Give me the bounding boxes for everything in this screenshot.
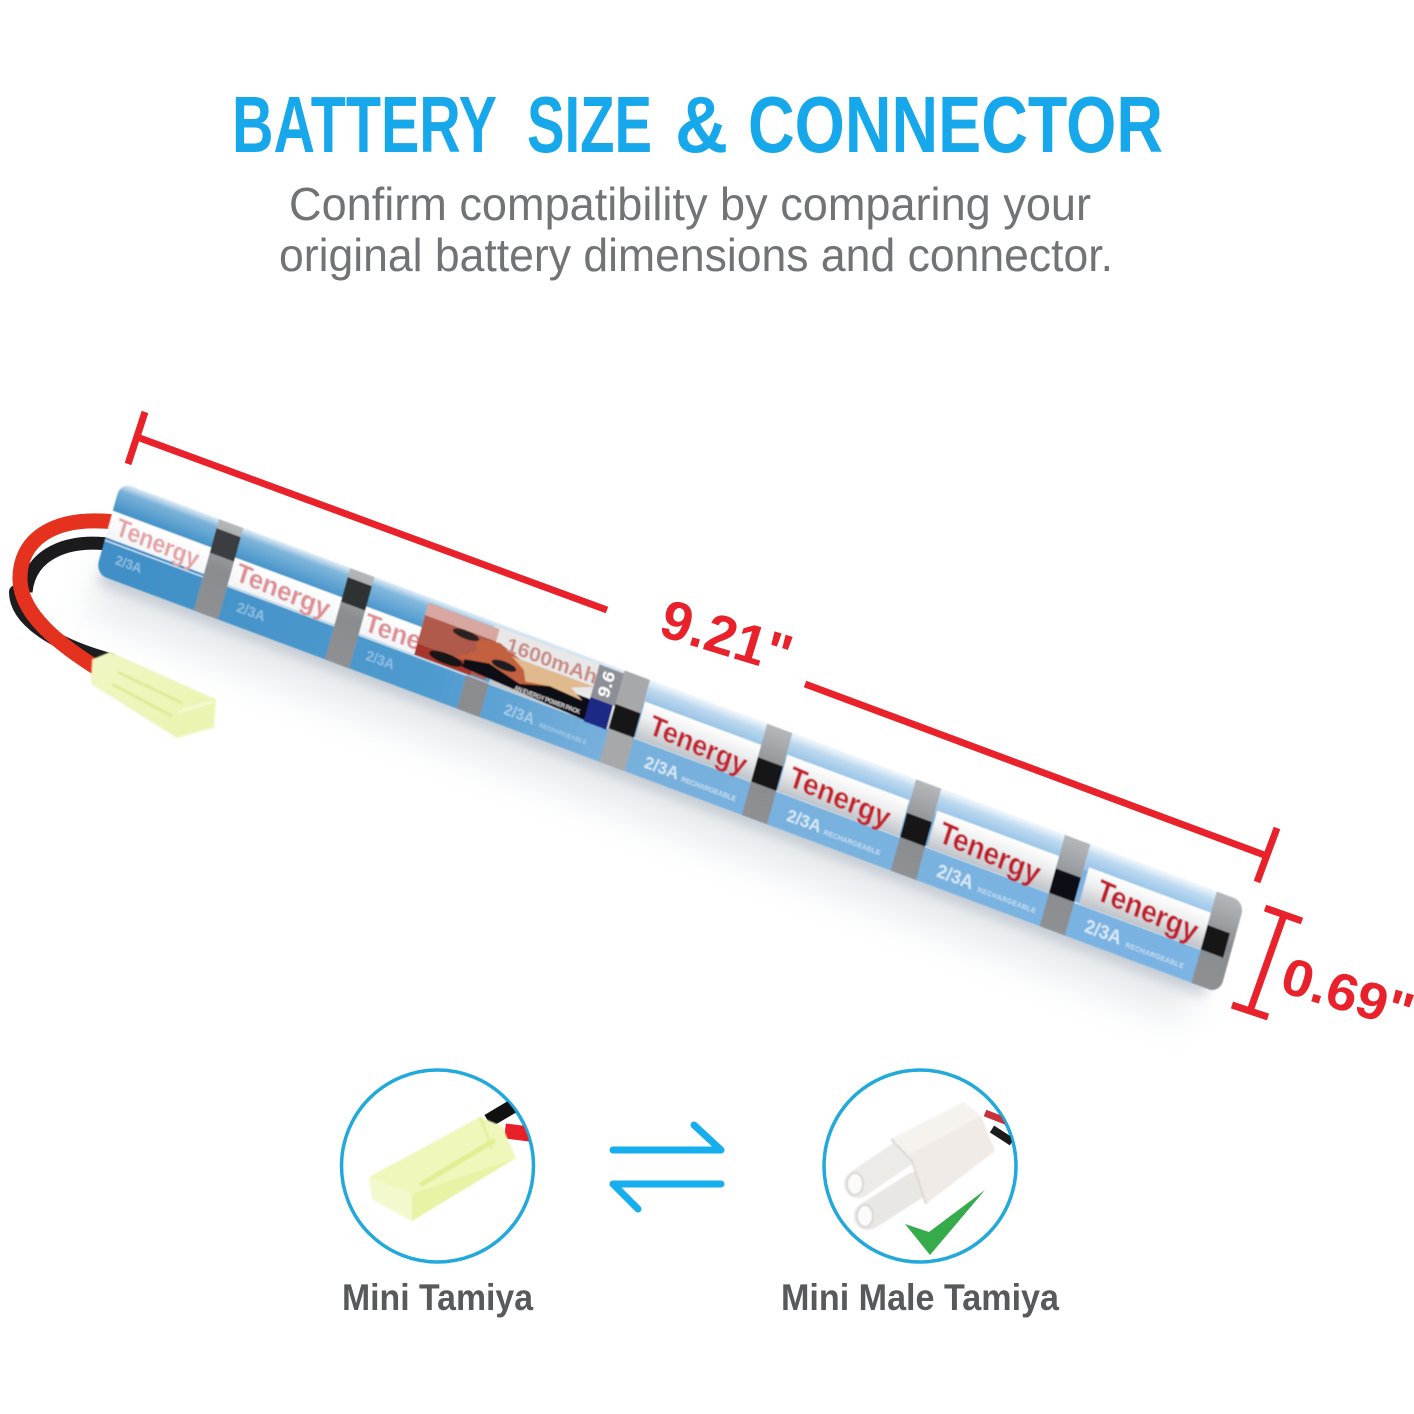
cell 5: 2/3A xyxy=(642,751,682,784)
cell 1: Tenergy xyxy=(113,514,203,574)
cell 2: 2/3A xyxy=(235,600,267,626)
cell 7: 2/3A xyxy=(935,859,976,893)
cell 2: Tenergy xyxy=(232,558,334,624)
connector wires xyxy=(16,521,115,670)
icon: green check mark xyxy=(905,1190,985,1255)
subtitle xyxy=(279,178,1113,281)
cell dividers xyxy=(194,519,1245,993)
cell 8 xyxy=(1078,866,1212,969)
subtitle: Confirm compatibility by comparing your xyxy=(289,178,1091,230)
cell 5 xyxy=(634,701,762,802)
title: SIZE xyxy=(527,80,652,169)
cell 1: 2/3A xyxy=(114,552,144,577)
title: & xyxy=(675,80,728,169)
cell 6: 2/3A xyxy=(785,804,824,837)
cell 3: 2/3A xyxy=(364,648,396,674)
icon: bidirectional arrows xyxy=(613,1125,721,1209)
central wrapper label with flames: AN EVERGY POWER PACK xyxy=(513,685,581,716)
connector circle: Mini Tamiya xyxy=(342,1070,534,1262)
label: Mini Tamiya: Mini Tamiya xyxy=(342,1277,533,1318)
cell 5: RECHARGEABLE xyxy=(680,774,737,803)
cell 5: Tenergy xyxy=(645,709,752,781)
cell 7: Tenergy xyxy=(935,816,1045,891)
cell 8: 2/3A xyxy=(1083,915,1124,949)
central wrapper label with flames xyxy=(413,601,626,731)
cell 6: Tenergy xyxy=(785,761,895,835)
width dimension: 0.69 inch xyxy=(1232,908,1414,1042)
cell 4 xyxy=(488,678,616,745)
central wrapper label with flames: 9.6 xyxy=(593,668,619,700)
cell 3: Tenergy xyxy=(361,608,463,671)
length dimension: 9.21 inch: 9.21" xyxy=(653,587,800,686)
cell 8: Tenergy xyxy=(1092,874,1203,949)
width dimension: 0.69 inch: 0.69" xyxy=(1274,947,1414,1042)
title: BATTERY xyxy=(232,80,497,169)
cell 6: RECHARGEABLE xyxy=(823,827,882,857)
cell 7: RECHARGEABLE xyxy=(976,885,1037,915)
title: CONNECTOR xyxy=(748,80,1163,169)
length dimension: 9.21 inch xyxy=(128,412,1277,882)
label: Mini Male Tamiya: Mini Male Tamiya xyxy=(781,1277,1059,1318)
connector circle: Mini Male Tamiya xyxy=(824,1070,1016,1262)
subtitle: original battery dimensions and connector. xyxy=(279,229,1113,281)
cell 4: RECHARGEABLE xyxy=(538,722,588,747)
title xyxy=(232,80,1163,169)
battery shadow xyxy=(87,561,1212,1026)
cell 7 xyxy=(920,811,1059,920)
cell 4: 2/3A xyxy=(502,701,536,729)
central wrapper label with flames: 1600mAh xyxy=(504,634,600,689)
cell 8: RECHARGEABLE xyxy=(1124,940,1185,971)
cell 6 xyxy=(777,754,910,856)
battery stick xyxy=(95,481,1245,993)
connector: yellow mini Tamiya plug xyxy=(92,653,215,737)
